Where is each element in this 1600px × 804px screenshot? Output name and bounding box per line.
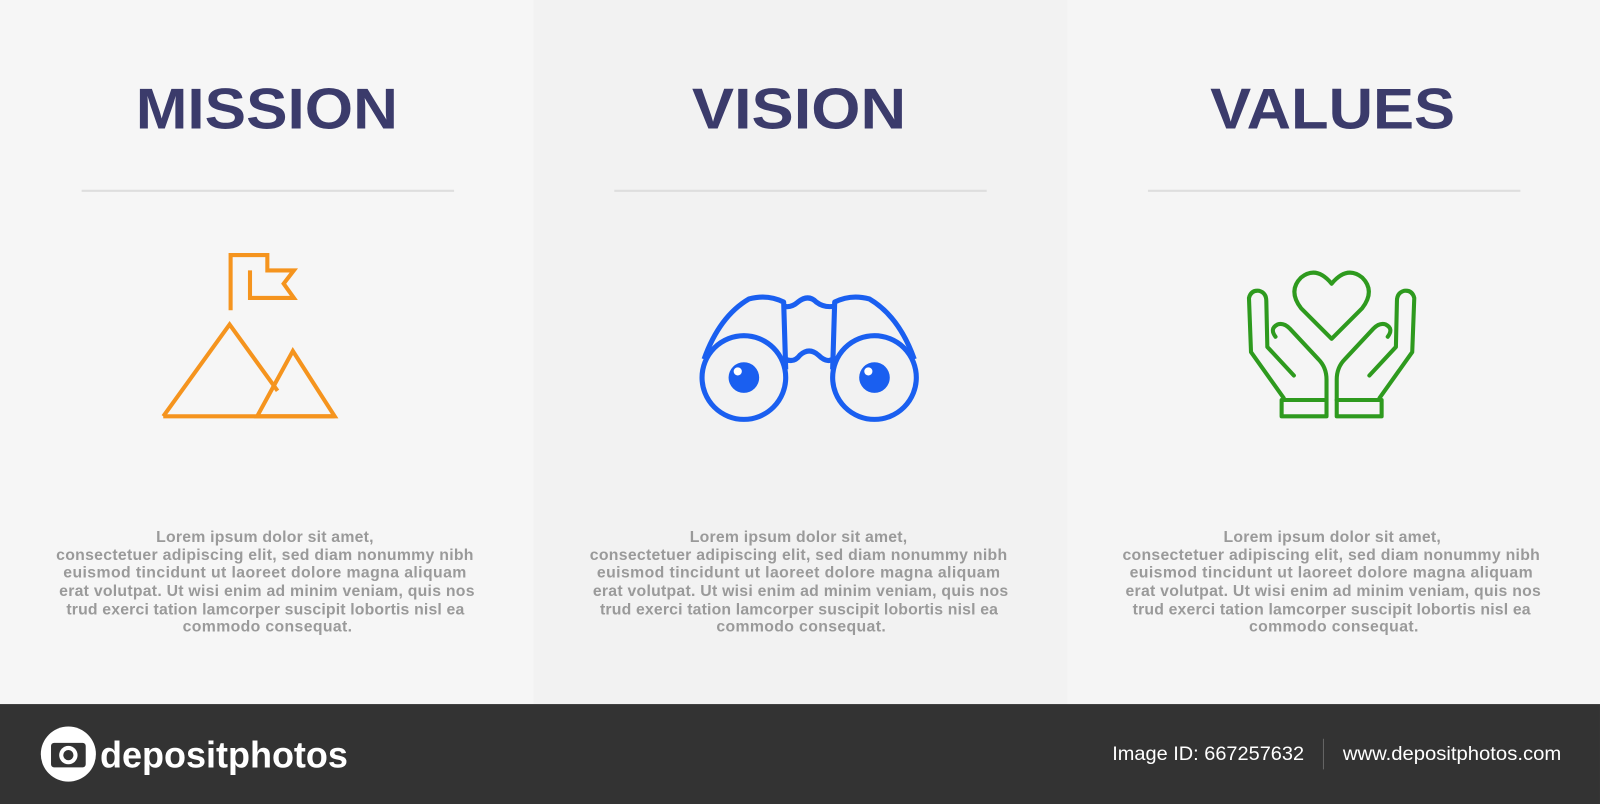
image id: Image ID: 667257632: [1112, 743, 1304, 765]
text block: vision: consectetuer adipiscing elit, sed diam nonummy nibh: [590, 547, 1007, 564]
text block: values: trud exerci tation lamcorper suscipit lobortis nisl ea: [1133, 601, 1531, 618]
text block: mission: consectetuer adipiscing elit, sed diam nonummy nibh: [56, 547, 473, 564]
logo text: depositphotos: [100, 734, 348, 775]
panel: mission: [56, 78, 475, 636]
text block: mission: euismod tincidunt ut laoreet dolore magna aliquam: [63, 565, 466, 582]
website url: www.depositphotos.com: [1342, 743, 1561, 765]
text block: values: Lorem ipsum dolor sit amet,: [1223, 529, 1441, 546]
text block: vision: commodo consequat.: [716, 619, 886, 636]
heading: values: VALUES: [1210, 78, 1455, 142]
heading: vision: VISION: [692, 78, 906, 142]
icon: binoculars: [702, 297, 916, 419]
icon: mountain with flag: [163, 255, 335, 416]
text block: vision: [590, 529, 1008, 636]
text block: mission: Lorem ipsum dolor sit amet,: [156, 529, 373, 546]
text block: values: [1122, 529, 1541, 636]
text block: mission: commodo consequat.: [183, 619, 352, 636]
text block: values: euismod tincidunt ut laoreet dolore magna aliquam: [1130, 565, 1533, 582]
text block: mission: erat volutpat. Ut wisi enim ad minim veniam, quis nos: [59, 583, 475, 600]
text block: vision: trud exerci tation lamcorper suscipit lobortis nisl ea: [600, 601, 998, 618]
text block: values: commodo consequat.: [1249, 619, 1418, 636]
panel: vision: [590, 78, 1008, 636]
footer bar: [0, 704, 1600, 804]
icon: hands with heart: [1249, 273, 1414, 416]
text block: vision: euismod tincidunt ut laoreet dolore magna aliquam: [597, 565, 1000, 582]
text block: mission: [56, 529, 475, 636]
icon: camera logo: [41, 727, 96, 782]
text block: mission: trud exerci tation lamcorper suscipit lobortis nisl ea: [66, 601, 464, 618]
text block: vision: erat volutpat. Ut wisi enim ad minim veniam, quis nos: [593, 583, 1008, 600]
heading: mission: MISSION: [136, 78, 398, 142]
text block: values: erat volutpat. Ut wisi enim ad minim veniam, quis nos: [1126, 583, 1541, 600]
text block: values: consectetuer adipiscing elit, sed diam nonummy nibh: [1122, 547, 1540, 564]
panel: values: [1122, 78, 1541, 636]
text block: vision: Lorem ipsum dolor sit amet,: [690, 529, 907, 546]
